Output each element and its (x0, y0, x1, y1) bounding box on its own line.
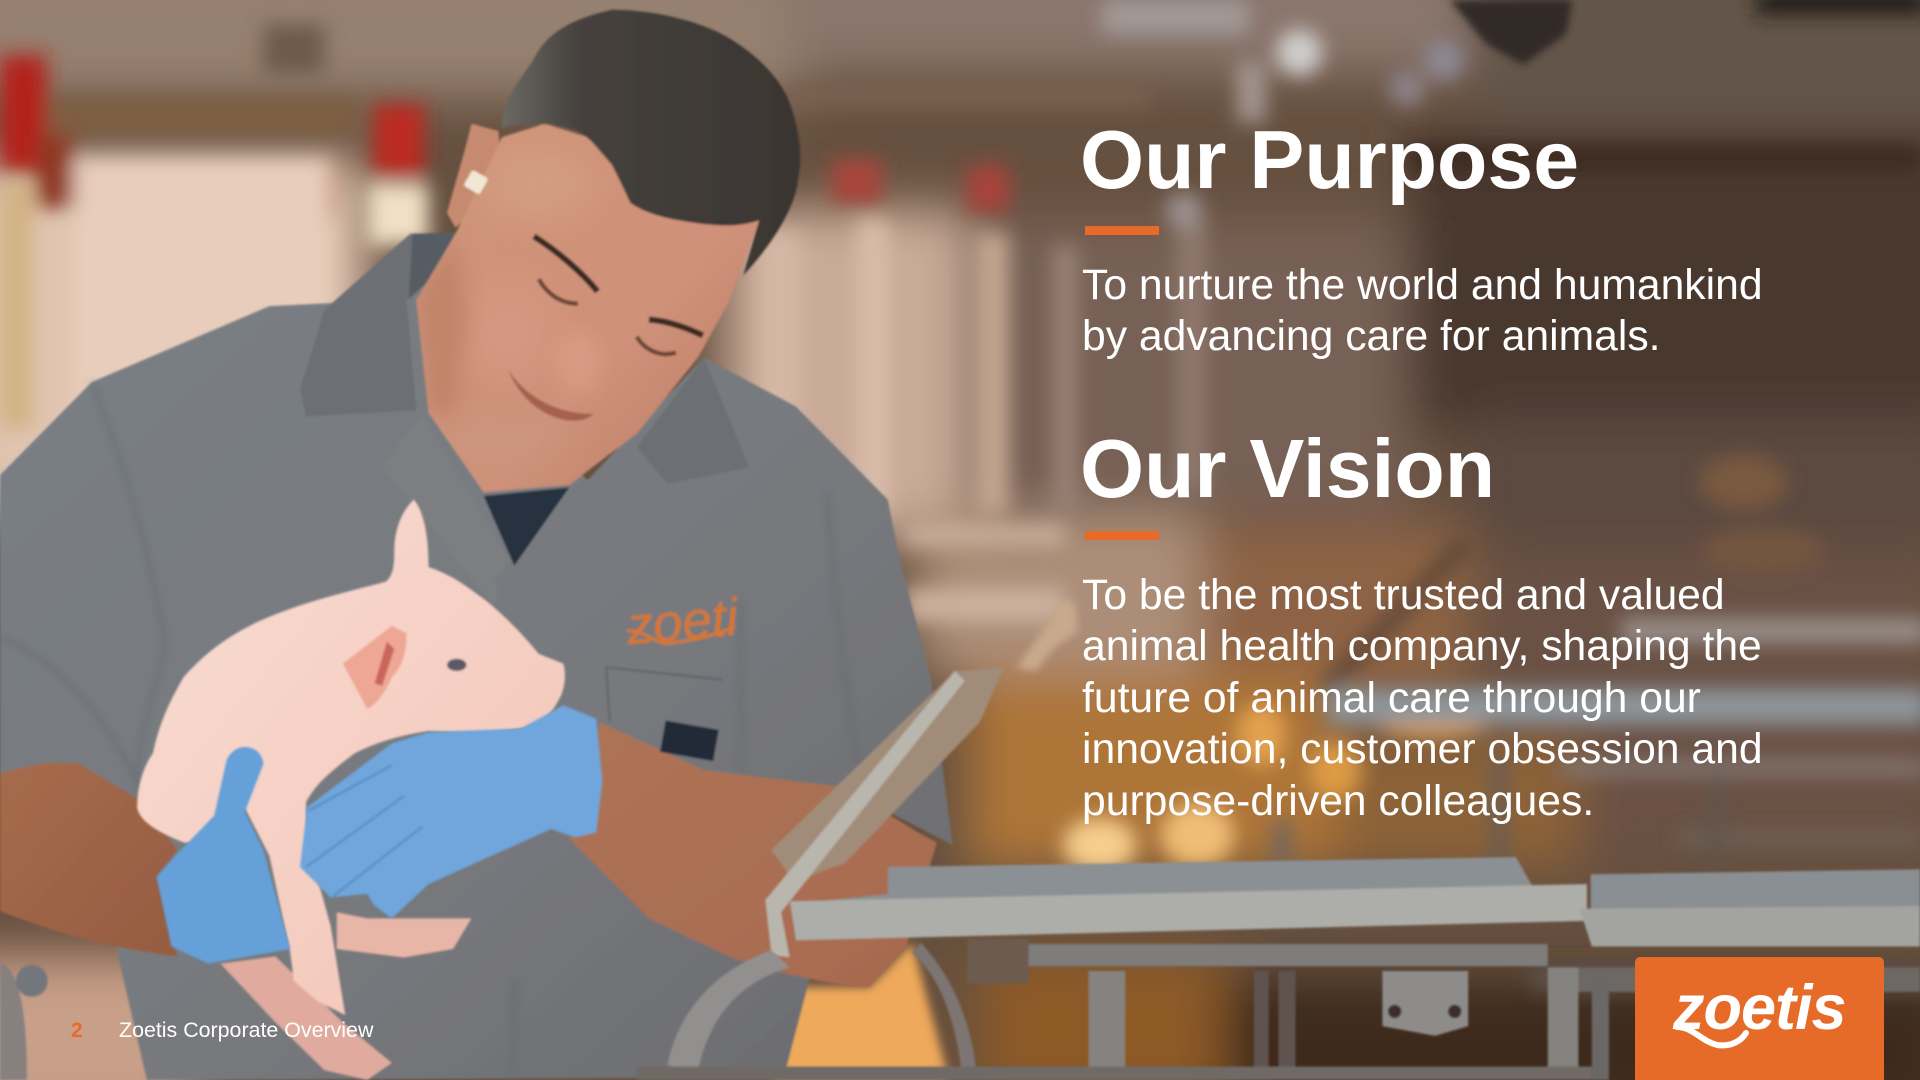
collar left (300, 233, 456, 416)
piglet ear (343, 626, 407, 709)
logo: zoetis badge (1635, 957, 1884, 1080)
text: vision statement: To be the most trusted and valued (1082, 571, 1725, 619)
man (0, 10, 953, 1080)
hair (502, 10, 800, 276)
left glove (157, 747, 290, 964)
collar dark inner (409, 233, 456, 299)
text: vision statement (1082, 571, 1763, 825)
blue gloves (157, 705, 602, 964)
collar fold (382, 416, 508, 606)
body (137, 500, 565, 1015)
top rail lower (790, 884, 1587, 940)
logo wordmark: zoetis (1673, 973, 1846, 1043)
mouth (508, 370, 594, 421)
foreground post left (0, 962, 27, 1080)
undershirt (484, 487, 569, 566)
clipboard (771, 667, 1004, 882)
text: purpose statement: by advancing care for animals. (1082, 312, 1661, 360)
right rail (1591, 869, 1920, 911)
text: vision statement: purpose-driven colleagues. (1082, 777, 1594, 825)
clothespin on clipboard (1016, 600, 1078, 671)
feed hopper silhouette (1450, 0, 1572, 65)
text: vision statement: animal health company, shaping the (1082, 622, 1762, 670)
ear (447, 124, 502, 228)
orange rule under Our Purpose (1085, 226, 1159, 235)
curved pipes (667, 950, 790, 1071)
piglet eye (447, 659, 467, 671)
footer page number: 2 (71, 1019, 83, 1042)
bracket plate (1382, 971, 1468, 1036)
right glove (300, 705, 602, 918)
shirt (0, 233, 953, 1080)
face shading (418, 178, 590, 412)
collar right (493, 456, 667, 606)
face (416, 124, 759, 492)
text: vision statement: innovation, customer obsession and (1082, 725, 1763, 773)
shirt logo: zoeti (623, 588, 742, 656)
shirt pocket (606, 667, 722, 722)
near forearm (0, 763, 178, 956)
heading: Our Vision: Our Vision (1080, 423, 1495, 515)
text: purpose statement (1082, 261, 1763, 360)
top rail upper (796, 857, 1537, 904)
lower hind leg (220, 956, 392, 1080)
text: vision statement: future of animal care through our (1082, 674, 1701, 722)
far forearm (569, 722, 937, 987)
logo swoosh (1674, 1029, 1749, 1048)
metal pen fence (0, 857, 1920, 1080)
ear plug (463, 170, 488, 195)
footer title: Zoetis Corporate Overview (119, 1018, 373, 1042)
piglet (137, 500, 565, 1080)
orange rule under Our Vision (1085, 531, 1159, 540)
lower pipe (1021, 944, 1548, 966)
shirt folds and sleeve seams (0, 382, 857, 1080)
hind leg (337, 912, 471, 958)
heading: Our Purpose: Our Purpose (1080, 114, 1579, 206)
text: purpose statement: To nurture the world and humankind (1082, 261, 1763, 309)
eyebrows and eyes (534, 236, 598, 291)
warm light behind the fence (774, 943, 949, 1080)
pocket tag (660, 720, 719, 761)
